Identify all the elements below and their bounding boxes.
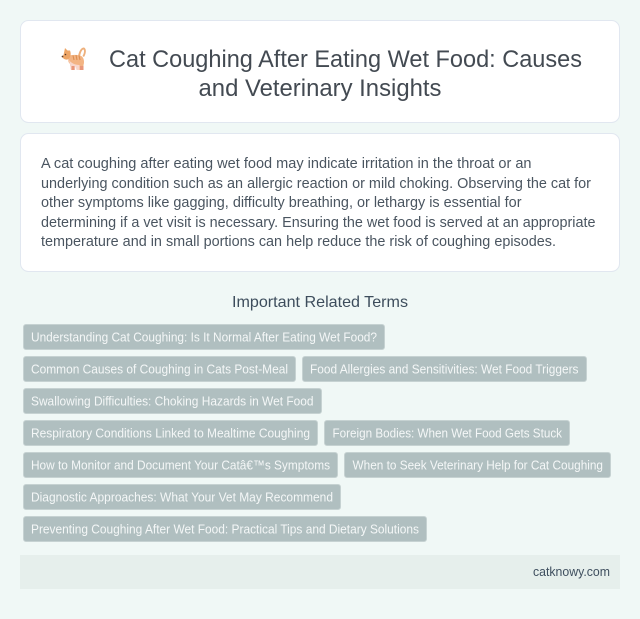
panel: summary paragraph [20,134,620,272]
tag: food allergies [302,356,586,382]
tag list [24,324,610,542]
tag: swallowing difficulties: Swallowing Difficulties: Choking Hazards in Wet Food [31,394,314,408]
tag: preventing coughing: Preventing Coughing After Wet Food: Practical Tips and Dietary Solutions [31,522,419,536]
title text: and Veterinary Insights [198,75,442,102]
tag: swallowing difficulties [24,388,322,414]
paragraph text: determining if a vet visit is necessary. Ensuring the wet food is served at an appropriate [41,214,596,231]
tag: diagnostic approaches [24,484,340,510]
tag: how to monitor [24,452,338,478]
tag: foreign bodies [324,420,570,446]
icon: cat [62,48,86,70]
title text: Cat Coughing After Eating Wet Food: Causes [109,46,582,73]
footer [20,555,620,589]
tag: respiratory conditions [24,420,318,446]
tag: when to seek help: When to Seek Veterinary Help for Cat Coughing [352,458,603,472]
tag: food allergies: Food Allergies and Sensitivities: Wet Food Triggers [310,362,579,376]
paragraph text: A cat coughing after eating wet food may indicate irritation in the throat or an [41,155,532,172]
footer site name: catknowy.com [533,564,610,579]
tag: understanding cat coughing [24,324,384,350]
paragraph text: other symptoms like gagging, difficulty breathing, or lethargy is essential for [41,194,522,211]
tag: foreign bodies: Foreign Bodies: When Wet Food Gets Stuck [332,426,562,440]
heading: important related terms: Important Related Terms [232,294,408,311]
tag: respiratory conditions: Respiratory Conditions Linked to Mealtime Coughing [31,426,310,440]
paragraph text: underlying condition such as an allergic reaction or mild choking. Observing the cat for [41,175,591,192]
tag: how to monitor: How to Monitor and Document Your Catâ€™s Symptoms [31,458,330,472]
tag: diagnostic approaches: Diagnostic Approaches: What Your Vet May Recommend [31,490,333,504]
paragraph text: temperature and in small portions can help reduce the risk of coughing episodes. [41,233,556,250]
paragraph text [41,155,596,250]
tag: common causes: Common Causes of Coughing in Cats Post-Meal [31,362,288,376]
tag: common causes [24,356,296,382]
tag: preventing coughing [24,516,426,542]
tag: understanding cat coughing: Understanding Cat Coughing: Is It Normal After Eating Wet Food? [31,330,377,344]
title text [109,46,582,102]
panel: title card [20,20,620,122]
tag: when to seek help [344,452,610,478]
